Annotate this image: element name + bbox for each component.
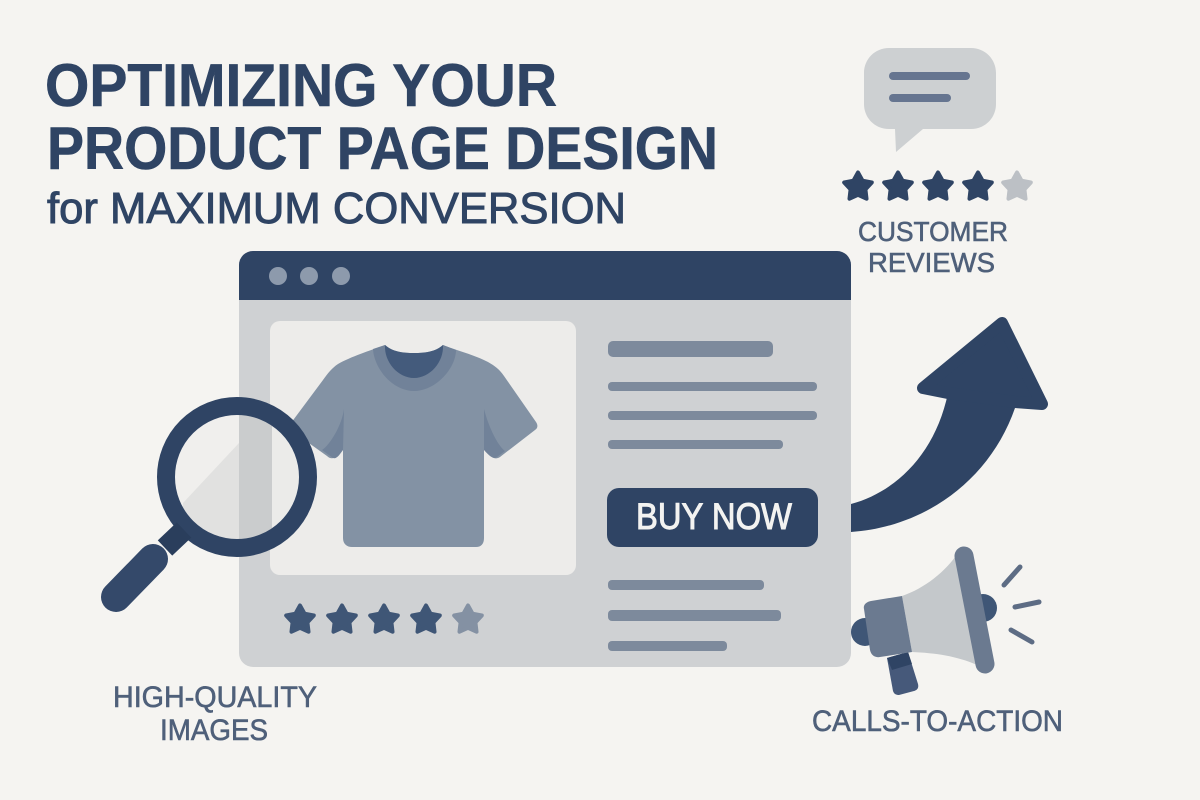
icon: t-shirt (290, 345, 537, 547)
arrow: growth (851, 323, 1042, 532)
label: customer reviews: REVIEWS (868, 247, 995, 278)
icon: magnifying glass (116, 406, 312, 597)
title: OPTIMIZING YOUR (45, 52, 557, 119)
title: for MAXIMUM CONVERSION (47, 184, 626, 233)
icon: speech bubble (864, 48, 996, 152)
panel: browser window (239, 251, 851, 667)
review stars (844, 172, 1031, 199)
product name bar (608, 341, 773, 357)
lower detail lines (608, 580, 781, 651)
browser title bar (239, 251, 851, 300)
icon: megaphone (851, 553, 1039, 695)
label: high-quality images: IMAGES (160, 714, 268, 747)
product image panel (270, 321, 576, 575)
buy now button: BUY NOW (636, 496, 792, 537)
title: PRODUCT PAGE DESIGN (47, 115, 718, 182)
lens glass (183, 424, 272, 539)
handle (165, 530, 184, 548)
label: customer reviews: CUSTOMER (858, 216, 1008, 247)
buy now button (607, 488, 818, 547)
lens ring (166, 406, 308, 548)
label: high-quality images (113, 681, 317, 747)
title (45, 52, 718, 233)
description lines (608, 382, 817, 449)
label: high-quality images: HIGH-QUALITY (113, 681, 317, 714)
window dots (269, 267, 350, 285)
label: calls-to-action: CALLS-TO-ACTION (812, 705, 1063, 738)
rating stars (286, 606, 482, 632)
sound rays (1004, 567, 1039, 642)
label: customer reviews (858, 216, 1008, 278)
